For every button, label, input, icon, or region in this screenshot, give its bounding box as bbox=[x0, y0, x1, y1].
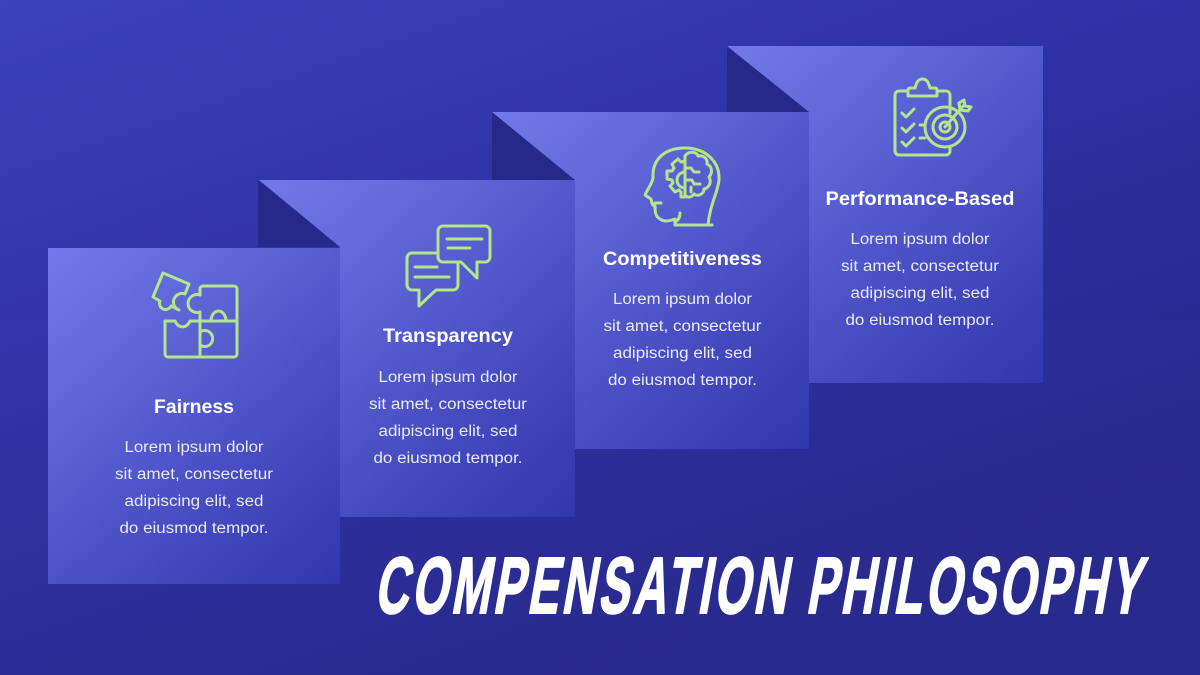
text block: adipiscing elit, sed bbox=[124, 493, 264, 510]
icon: clipboard with target bbox=[895, 79, 971, 155]
text block bbox=[604, 291, 762, 389]
text block: adipiscing elit, sed bbox=[378, 423, 518, 440]
text block: do eiusmod tempor. bbox=[120, 520, 268, 537]
text block: sit amet, consectetur bbox=[115, 466, 273, 483]
text block: sit amet, consectetur bbox=[369, 396, 527, 413]
text block: do eiusmod tempor. bbox=[608, 372, 757, 389]
heading: Performance-Based bbox=[826, 188, 1014, 210]
panel: transparency bbox=[258, 180, 575, 517]
heading: Fairness bbox=[154, 396, 234, 418]
text block: Lorem ipsum dolor bbox=[378, 369, 518, 386]
panel: fairness bbox=[48, 248, 340, 584]
text block bbox=[841, 231, 999, 329]
text block: Lorem ipsum dolor bbox=[124, 439, 264, 456]
heading: Competitiveness bbox=[603, 248, 762, 270]
text block: Lorem ipsum dolor bbox=[850, 231, 990, 248]
text block: adipiscing elit, sed bbox=[613, 345, 752, 362]
panel: competitiveness bbox=[492, 112, 809, 449]
title: COMPENSATION PHILOSOPHY bbox=[371, 542, 1152, 631]
text block: adipiscing elit, sed bbox=[850, 285, 990, 302]
text block: Lorem ipsum dolor bbox=[613, 291, 752, 308]
text block: do eiusmod tempor. bbox=[846, 312, 994, 329]
panel: performance-based bbox=[727, 46, 1043, 383]
heading: Transparency bbox=[383, 325, 513, 347]
text block bbox=[369, 369, 527, 467]
text block: sit amet, consectetur bbox=[841, 258, 999, 275]
text block bbox=[115, 439, 273, 537]
icon: chat bubbles bbox=[407, 226, 490, 306]
text block: sit amet, consectetur bbox=[604, 318, 762, 335]
icon: puzzle pieces bbox=[153, 273, 237, 357]
text block: do eiusmod tempor. bbox=[374, 450, 522, 467]
icon: head with brain and gear bbox=[645, 148, 719, 225]
